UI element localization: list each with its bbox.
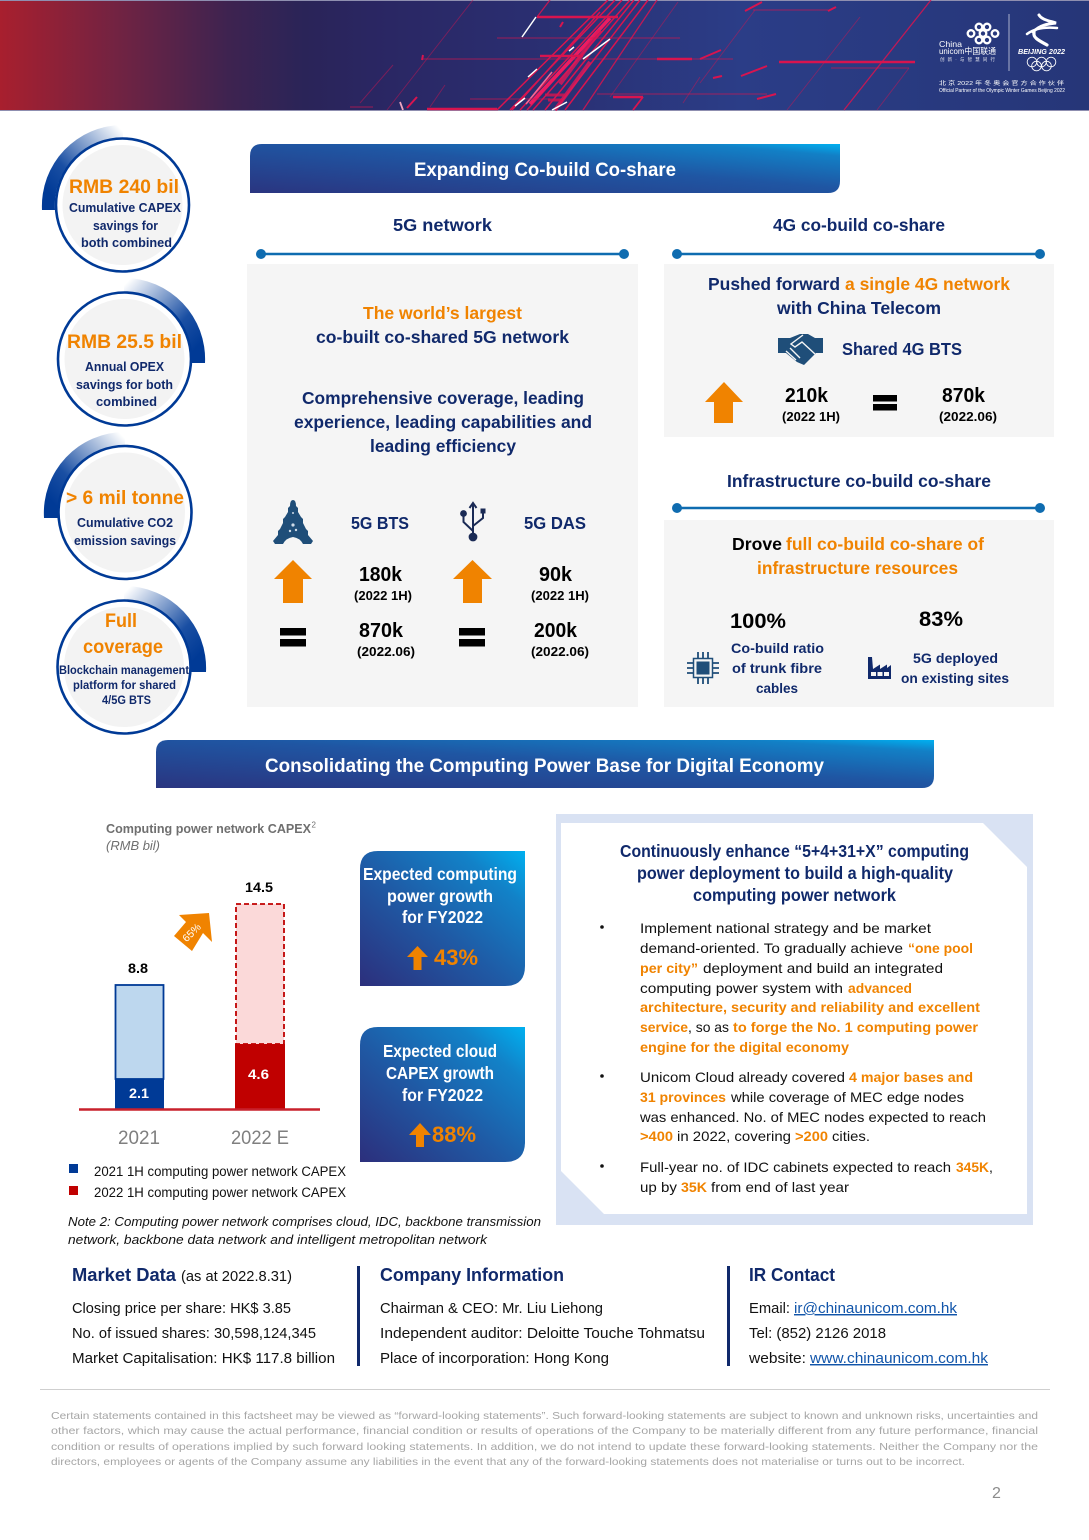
axis labels: 2021: [118, 1128, 160, 1149]
bullet: IDC cabinets: 35K: [681, 1179, 707, 1195]
info: market data: Market Data: [72, 1265, 177, 1285]
stat circle: more than 6 mil tonne: emission savings: [74, 534, 176, 548]
text: comprehensive coverage: Comprehensive coverage, leading: [302, 388, 584, 408]
info: company information: Independent auditor: Deloitte Touche Tohmatsu: [380, 1326, 705, 1342]
bullet: Unicom Cloud: 4 major bases and: [849, 1069, 973, 1085]
logo: China Unicom and Beijing 2022: 创新·与智慧同行: [940, 56, 996, 63]
faint horizontals: [350, 10, 909, 107]
bullet: national strategy: engine for the digital economy: [640, 1039, 849, 1055]
legend: [69, 1164, 346, 1200]
callout: cloud CAPEX growth 88%: Expected cloud: [383, 1041, 497, 1061]
stat circle: RMB 240 bil: [42, 125, 189, 272]
stat: 5G DAS: (2022 1H): [531, 589, 589, 603]
stat circle: RMB 25.5 bil: combined: [96, 395, 157, 409]
disclaimer: condition or results of operations implied by such forward looking statements. In addition, we do not intend to update these forward-looking statements. Neither the Company nor the: [51, 1441, 1038, 1453]
note 2: network, backbone data network and intelligent metropolitan network: [68, 1232, 489, 1247]
info: IR contact: www.chinaunicom.com.hk: [809, 1351, 989, 1367]
bar: 2021: 2.1: [129, 1085, 149, 1101]
stat circle: RMB 25.5 bil: RMB 25.5 bil: [67, 331, 182, 353]
main bundle: [497, 0, 648, 110]
label: Shared 4G BTS: Shared 4G BTS: [842, 339, 962, 359]
text: 5G deployed: on existing sites: [901, 670, 1009, 686]
text: full co-build: infrastructure resources: [757, 558, 958, 578]
heading: Infrastructure co-build co-share: Infrastructure co-build co-share: [727, 471, 991, 491]
disclaimer: Certain statements contained in this factsheet may be viewed as “forward-looking statements”. Such forward-looking statements are subject to known and unknown risks, uncertainties and: [51, 1410, 1038, 1422]
info: market data: Closing price per share: HK$ 3.85: [72, 1301, 291, 1317]
callout: cloud CAPEX growth 88%: [360, 1027, 525, 1162]
info: market data: (as at 2022.8.31): [181, 1269, 292, 1285]
bullet: national strategy: advanced: [848, 980, 912, 996]
callout: cloud CAPEX growth 88%: 88%: [432, 1122, 476, 1147]
stat: 870k: 870k: [942, 385, 986, 407]
callout: cloud CAPEX growth 88%: for FY2022: [402, 1085, 483, 1105]
logo: China Unicom and Beijing 2022: [939, 14, 1066, 94]
info: IR contact: website:: [748, 1351, 806, 1367]
bullet: Unicom Cloud: in 2022, covering: [677, 1128, 791, 1144]
logo: China Unicom and Beijing 2022: 北 京 2022 年 冬 奥 会 官 方 合 作 伙 伴: [939, 79, 1065, 87]
text: comprehensive coverage: experience, leading capabilities and: [294, 412, 592, 432]
icon: usb: [461, 503, 486, 540]
stat circle: RMB 25.5 bil: savings for both: [76, 378, 173, 392]
text: co-build ratio: cables: [756, 680, 798, 696]
text: co-build ratio: of trunk fibre: [732, 660, 822, 676]
info: market data: [72, 1265, 335, 1367]
text: world's largest: co-built co-shared 5G network: [316, 327, 569, 347]
stat: 210k: [782, 385, 840, 424]
stat circle: full coverage: coverage: [83, 636, 163, 658]
stat circle: more than 6 mil tonne: Cumulative CO2: [77, 516, 173, 530]
icon: handshake: [778, 334, 823, 365]
bullet: IDC cabinets: up by: [640, 1179, 677, 1195]
header banner: [0, 0, 1089, 111]
text: comprehensive coverage: leading efficiency: [370, 436, 516, 456]
icon: chip: [687, 652, 719, 684]
stat circle: RMB 25.5 bil: Annual OPEX: [85, 360, 165, 374]
text: co-build ratio: [731, 640, 824, 696]
text: comprehensive coverage: [294, 388, 592, 456]
icon: factory: [868, 657, 891, 679]
stat: 870k: (2022.06): [939, 410, 997, 424]
stat circle: RMB 240 bil: savings for: [93, 219, 158, 233]
bullet: IDC cabinets: ,: [989, 1159, 993, 1175]
text: single 4G network: with China Telecom: [776, 298, 941, 318]
stat circle: full coverage: Blockchain management: [59, 663, 189, 677]
heading: 4G co-build co-share: [672, 215, 1045, 259]
bar: 2021: 8.8: [128, 960, 148, 976]
callout: computing power growth 43%: power growth: [387, 886, 493, 906]
icon: Olympic rings: [1027, 57, 1056, 71]
chart title: (RMB bil): [106, 838, 160, 853]
disclaimer: directors, employees or agents of the Company assume any liabilities in the event that any of the forward-looking statements does not materialise or turns out to be incorrect.: [51, 1456, 965, 1468]
stat circle: full coverage: [58, 586, 206, 734]
icon: Beijing 2022 emblem: [1027, 15, 1057, 45]
stat: 5G DAS: [453, 513, 589, 659]
chart title: [106, 820, 316, 853]
stat: 210k: 210k: [785, 385, 829, 407]
text: world's largest: [316, 303, 569, 347]
bullet: Unicom Cloud: while coverage of MEC edge nodes: [730, 1089, 964, 1105]
icon: equals: [873, 395, 897, 410]
panel heading: computing power network: [693, 885, 896, 905]
stat circle: RMB 240 bil: RMB 240 bil: [69, 176, 179, 198]
bullet: national strategy: “one pool: [908, 940, 973, 956]
bright horizontals: [427, 17, 915, 109]
bullet: national strategy: deployment and build an integrated: [703, 960, 943, 976]
chart title: Computing power network CAPEX: [106, 821, 311, 836]
bullet: national strategy: Implement national strategy and be market: [640, 920, 931, 936]
bar: 2022 E: 14.5: [245, 879, 273, 895]
bullet: Unicom Cloud: Unicom Cloud already covered: [640, 1069, 845, 1085]
axis labels: [118, 1128, 289, 1149]
bullet: national strategy: demand-oriented. To gradually achieve: [640, 940, 903, 956]
growth arrow 65%: 65%: [180, 921, 204, 945]
callout: computing power growth 43%: Expected computing: [363, 864, 517, 884]
info: company information: Chairman & CEO: Mr. Liu Liehong: [380, 1301, 603, 1317]
stat circle: RMB 25.5 bil: [58, 278, 205, 426]
short dashes: [407, 2, 836, 108]
stat: 5G BTS: 870k: [359, 620, 404, 642]
stat: 5G BTS: (2022.06): [357, 645, 415, 659]
stat: 5G DAS: 5G DAS: [524, 513, 586, 533]
info: IR contact: [748, 1265, 989, 1367]
faint diagonals: [360, 0, 909, 110]
bullet: IDC cabinets: from end of last year: [711, 1179, 849, 1195]
legend: 2022 1H computing power network CAPEX: [94, 1185, 346, 1200]
callout: computing power growth 43%: for FY2022: [402, 907, 483, 927]
text: single 4G network: Pushed forward: [708, 274, 840, 294]
bullet: national strategy: per city”: [640, 960, 698, 976]
bullet: national strategy: architecture, security and reliability and excellent: [640, 999, 980, 1015]
panel heading: power deployment to build a high-quality: [637, 863, 953, 883]
panel heading: Continuously enhance “5+4+31+X” computing: [620, 841, 969, 861]
text: 5G deployed: [901, 650, 1009, 686]
stat circle: RMB 240 bil: both combined: [81, 236, 172, 250]
info: company information: Company Information: [380, 1265, 564, 1285]
section banner: Expanding Co-build Co-share: [250, 144, 840, 193]
stat circle: more than 6 mil tonne: > 6 mil tonne: [66, 487, 184, 509]
panel heading: [620, 841, 969, 905]
info: IR contact: ir@chinaunicom.com.hk: [794, 1301, 958, 1317]
stat: 5G BTS: [274, 513, 415, 659]
bullet: IDC cabinets: [600, 1159, 993, 1195]
stat: 5G DAS: 200k: [534, 620, 578, 642]
text: 5G deployed: 5G deployed: [913, 650, 998, 666]
text: co-build ratio: Co-build ratio: [731, 640, 824, 656]
bullet: national strategy: to forge the No. 1 computing power: [733, 1019, 979, 1035]
growth arrow 65%: [174, 913, 212, 951]
panel: 4G co-build co-share: [664, 264, 1054, 437]
logo: China Unicom and Beijing 2022: BEIJING 2022: [1018, 47, 1066, 56]
note 2: Note 2: Computing power network comprises cloud, IDC, backbone transmission: [68, 1214, 541, 1229]
bullet: Unicom Cloud: >400: [640, 1128, 673, 1144]
stat: 5G DAS: (2022.06): [531, 645, 589, 659]
stat: 5G BTS: 180k: [359, 564, 403, 586]
section banner: Consolidating the Computing Power Base: Consolidating the Computing Power Base for Digital Economy: [265, 755, 824, 777]
info: IR contact: IR Contact: [749, 1265, 835, 1285]
text: full co-build: full co-build co-share of: [786, 534, 984, 554]
callout: computing power growth 43%: 43%: [434, 945, 478, 970]
page number: 2: [992, 1485, 1001, 1502]
bullet: Unicom Cloud: [600, 1069, 986, 1144]
stat circle: full coverage: 4/5G BTS: [102, 693, 151, 707]
logo: China Unicom and Beijing 2022: Official Partner of the Olympic Winter Games Beijing 2022: [939, 88, 1065, 94]
icon: tower: [273, 500, 313, 544]
bullet: national strategy: [600, 920, 980, 1055]
disclaimer: other factors, which may cause the actual performance, financial condition or results of operations of the Company to be materially different from any future performance, financial: [51, 1425, 1038, 1437]
panel: computing power network text: [556, 814, 1033, 1225]
logo: China Unicom and Beijing 2022: China: [939, 39, 962, 49]
panel: 5G network: [247, 264, 638, 707]
bullet: IDC cabinets: 345K: [956, 1159, 989, 1175]
heading: 5G network: 5G network: [393, 215, 492, 235]
bullet: IDC cabinets: Full-year no. of IDC cabinets expected to reach: [640, 1159, 951, 1175]
stat circle: full coverage: Full: [105, 610, 137, 632]
icon: up arrow: [705, 382, 743, 423]
section banner: Expanding Co-build Co-share: Expanding Co-build Co-share: [414, 159, 676, 181]
text: world's largest: The world’s largest: [363, 303, 522, 323]
stat circle: RMB 240 bil: Cumulative CAPEX: [69, 201, 182, 215]
stat: 100%: 100%: [730, 610, 786, 633]
info: IR contact: Email:: [749, 1301, 790, 1317]
stat: 5G BTS: 5G BTS: [351, 513, 409, 533]
bullet: national strategy: computing power system with: [640, 980, 843, 996]
stat circle: full coverage: platform for shared: [73, 678, 176, 692]
heading: 5G network: [256, 215, 629, 259]
info: company information: Place of incorporation: Hong Kong: [380, 1351, 609, 1367]
heading: Infrastructure co-build co-share: [672, 471, 1045, 513]
stat: 210k: (2022 1H): [782, 410, 840, 424]
chart title: 2: [312, 820, 316, 830]
bullet: Unicom Cloud: was enhanced. No. of MEC nodes expected to reach: [639, 1109, 986, 1125]
stat: 5G DAS: 90k: [539, 564, 573, 586]
note 2: [68, 1214, 541, 1247]
disclaimer: [51, 1410, 1038, 1468]
text: full co-build: Drove: [732, 534, 782, 554]
info: company information: [380, 1265, 705, 1367]
callout: cloud CAPEX growth 88%: CAPEX growth: [386, 1063, 494, 1083]
bar: 2022 E: 4.6: [248, 1066, 269, 1082]
stat: 870k: [939, 385, 997, 424]
bullet: Unicom Cloud: cities.: [832, 1128, 870, 1144]
stat circle: more than 6 mil tonne: [44, 432, 192, 579]
info: IR contact: Tel: (852) 2126 2018: [749, 1326, 886, 1342]
logo: China Unicom and Beijing 2022: unicom中国联通: [939, 46, 996, 56]
stat: 83%: 83%: [919, 608, 963, 631]
bullet: Unicom Cloud: >200: [795, 1128, 828, 1144]
bullet: national strategy: service: [640, 1019, 688, 1035]
icon: China Unicom knot: [968, 24, 998, 43]
panel: infrastructure co-build co-share: [664, 520, 1054, 707]
legend: 2021 1H computing power network CAPEX: [94, 1164, 346, 1179]
callout: computing power growth 43%: [360, 851, 525, 986]
bar: 2021: [115, 960, 164, 1109]
bar: 2022 E: [235, 879, 285, 1109]
bar chart: computing power network CAPEX: [69, 820, 346, 1200]
axis labels: 2022 E: [231, 1128, 289, 1149]
stat: 5G BTS: (2022 1H): [354, 589, 412, 603]
text: single 4G network: a single 4G network: [845, 274, 1010, 294]
info: market data: No. of issued shares: 30,598,124,345: [72, 1326, 316, 1342]
text: single 4G network: [708, 274, 1010, 318]
info: market data: Market Capitalisation: HK$ 117.8 billion: [72, 1351, 335, 1367]
section banner: Consolidating the Computing Power Base: [156, 740, 934, 788]
bullet: Unicom Cloud: 31 provinces: [640, 1089, 726, 1105]
heading: 4G co-build co-share: 4G co-build co-share: [773, 215, 945, 235]
bullet: national strategy: , so as: [688, 1019, 729, 1035]
text: full co-build: [732, 534, 984, 578]
